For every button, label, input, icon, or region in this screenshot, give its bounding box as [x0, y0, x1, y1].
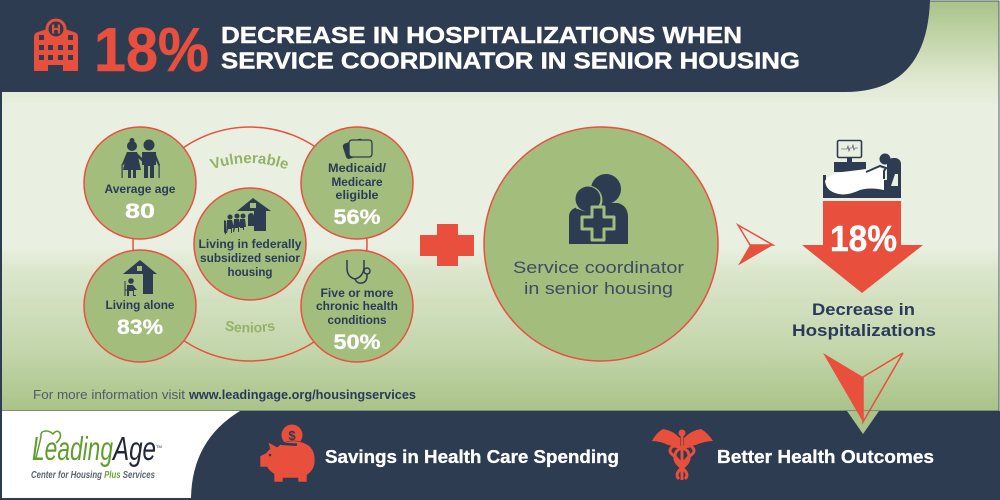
text: better health outcomes: Better Health Outcomes [717, 447, 934, 467]
label: Seniors [225, 321, 275, 332]
logo: LeadingAge: Center for Housing Plus Services [31, 469, 155, 481]
text: more information [33, 387, 416, 402]
circle: medicaid: Medicaid/ [328, 163, 387, 175]
arrow: pointing down [823, 353, 903, 434]
text: decrease in hospitalizations: Hospitalizations [792, 322, 936, 340]
circle: chronic conditions [301, 250, 413, 362]
circle: medicaid [301, 127, 413, 239]
icon: elderly couple [122, 138, 160, 178]
title: SERVICE COORDINATOR IN SENIOR HOUSING [221, 48, 800, 74]
text: decrease in hospitalizations [792, 301, 936, 340]
icon: people with medical cross [569, 174, 628, 244]
circle: chronic conditions: chronic health [316, 301, 398, 313]
circle: average age: 80 [125, 200, 155, 223]
logo: LeadingAge [31, 430, 162, 481]
circle: living alone: 83% [117, 316, 163, 339]
text: more information: For more information visit [33, 387, 185, 402]
vulnerable seniors ring [133, 127, 367, 361]
circle: average age: Average age [104, 184, 176, 196]
icon: patient in hospital bed [823, 140, 901, 198]
arrow: downward with 18% [802, 201, 923, 293]
circle: federally subsidized housing [194, 188, 306, 300]
circle: federally subsidized housing: subsidized senior [200, 253, 301, 265]
circle: chronic conditions: conditions [328, 315, 386, 327]
title: DECREASE IN HOSPITALIZATIONS WHEN [221, 22, 742, 48]
logo: LeadingAge: TM [156, 444, 162, 449]
text: decrease in hospitalizations: Decrease in [812, 301, 915, 319]
logo: LeadingAge: Leading [32, 430, 113, 467]
icon: insurance cards [342, 138, 372, 160]
icon: group in house [224, 198, 271, 235]
icon: caduceus [652, 429, 713, 480]
logo: LeadingAge: Age [112, 430, 156, 467]
label: Vulnerable [209, 154, 288, 169]
footer band [0, 411, 1000, 500]
header shape [0, 0, 930, 411]
circle: service coordinator [484, 127, 718, 361]
circle: average age [84, 127, 196, 239]
circle: federally subsidized housing: housing [228, 267, 272, 279]
icon: stethoscope [347, 260, 370, 283]
icon: plus sign [420, 224, 474, 266]
text: more information: www.leadingage.org/housingservices [188, 387, 416, 402]
logo panel [2, 411, 240, 498]
circle: living alone: Living alone [106, 300, 174, 312]
hospital icon [34, 20, 78, 71]
headline figure 18%: 18% [94, 16, 209, 85]
icon: piggy bank [260, 424, 315, 482]
icon: piggy bank: $ [288, 428, 296, 443]
text: savings: Savings in Health Care Spending [325, 447, 619, 467]
label: Vulnerable: Vulnerable [209, 154, 288, 169]
circle: federally subsidized housing: Living in federally [198, 239, 302, 251]
circle: service coordinator: in senior housing [524, 280, 673, 298]
label: Seniors: Seniors [225, 321, 275, 332]
title [221, 22, 800, 74]
circle: chronic conditions: 50% [334, 331, 381, 354]
arrow: pointing right [738, 225, 773, 266]
circle: service coordinator: Service coordinator [513, 259, 685, 277]
circle: medicaid: 56% [334, 206, 381, 229]
circle: chronic conditions: Five or more [320, 288, 394, 300]
circle: living alone [84, 250, 196, 362]
icon: person alone in house [123, 260, 157, 296]
circle: medicaid: Medicare [332, 177, 382, 189]
arrow: downward with 18%: 18% [830, 218, 897, 259]
circle: medicaid: eligible [336, 190, 378, 202]
